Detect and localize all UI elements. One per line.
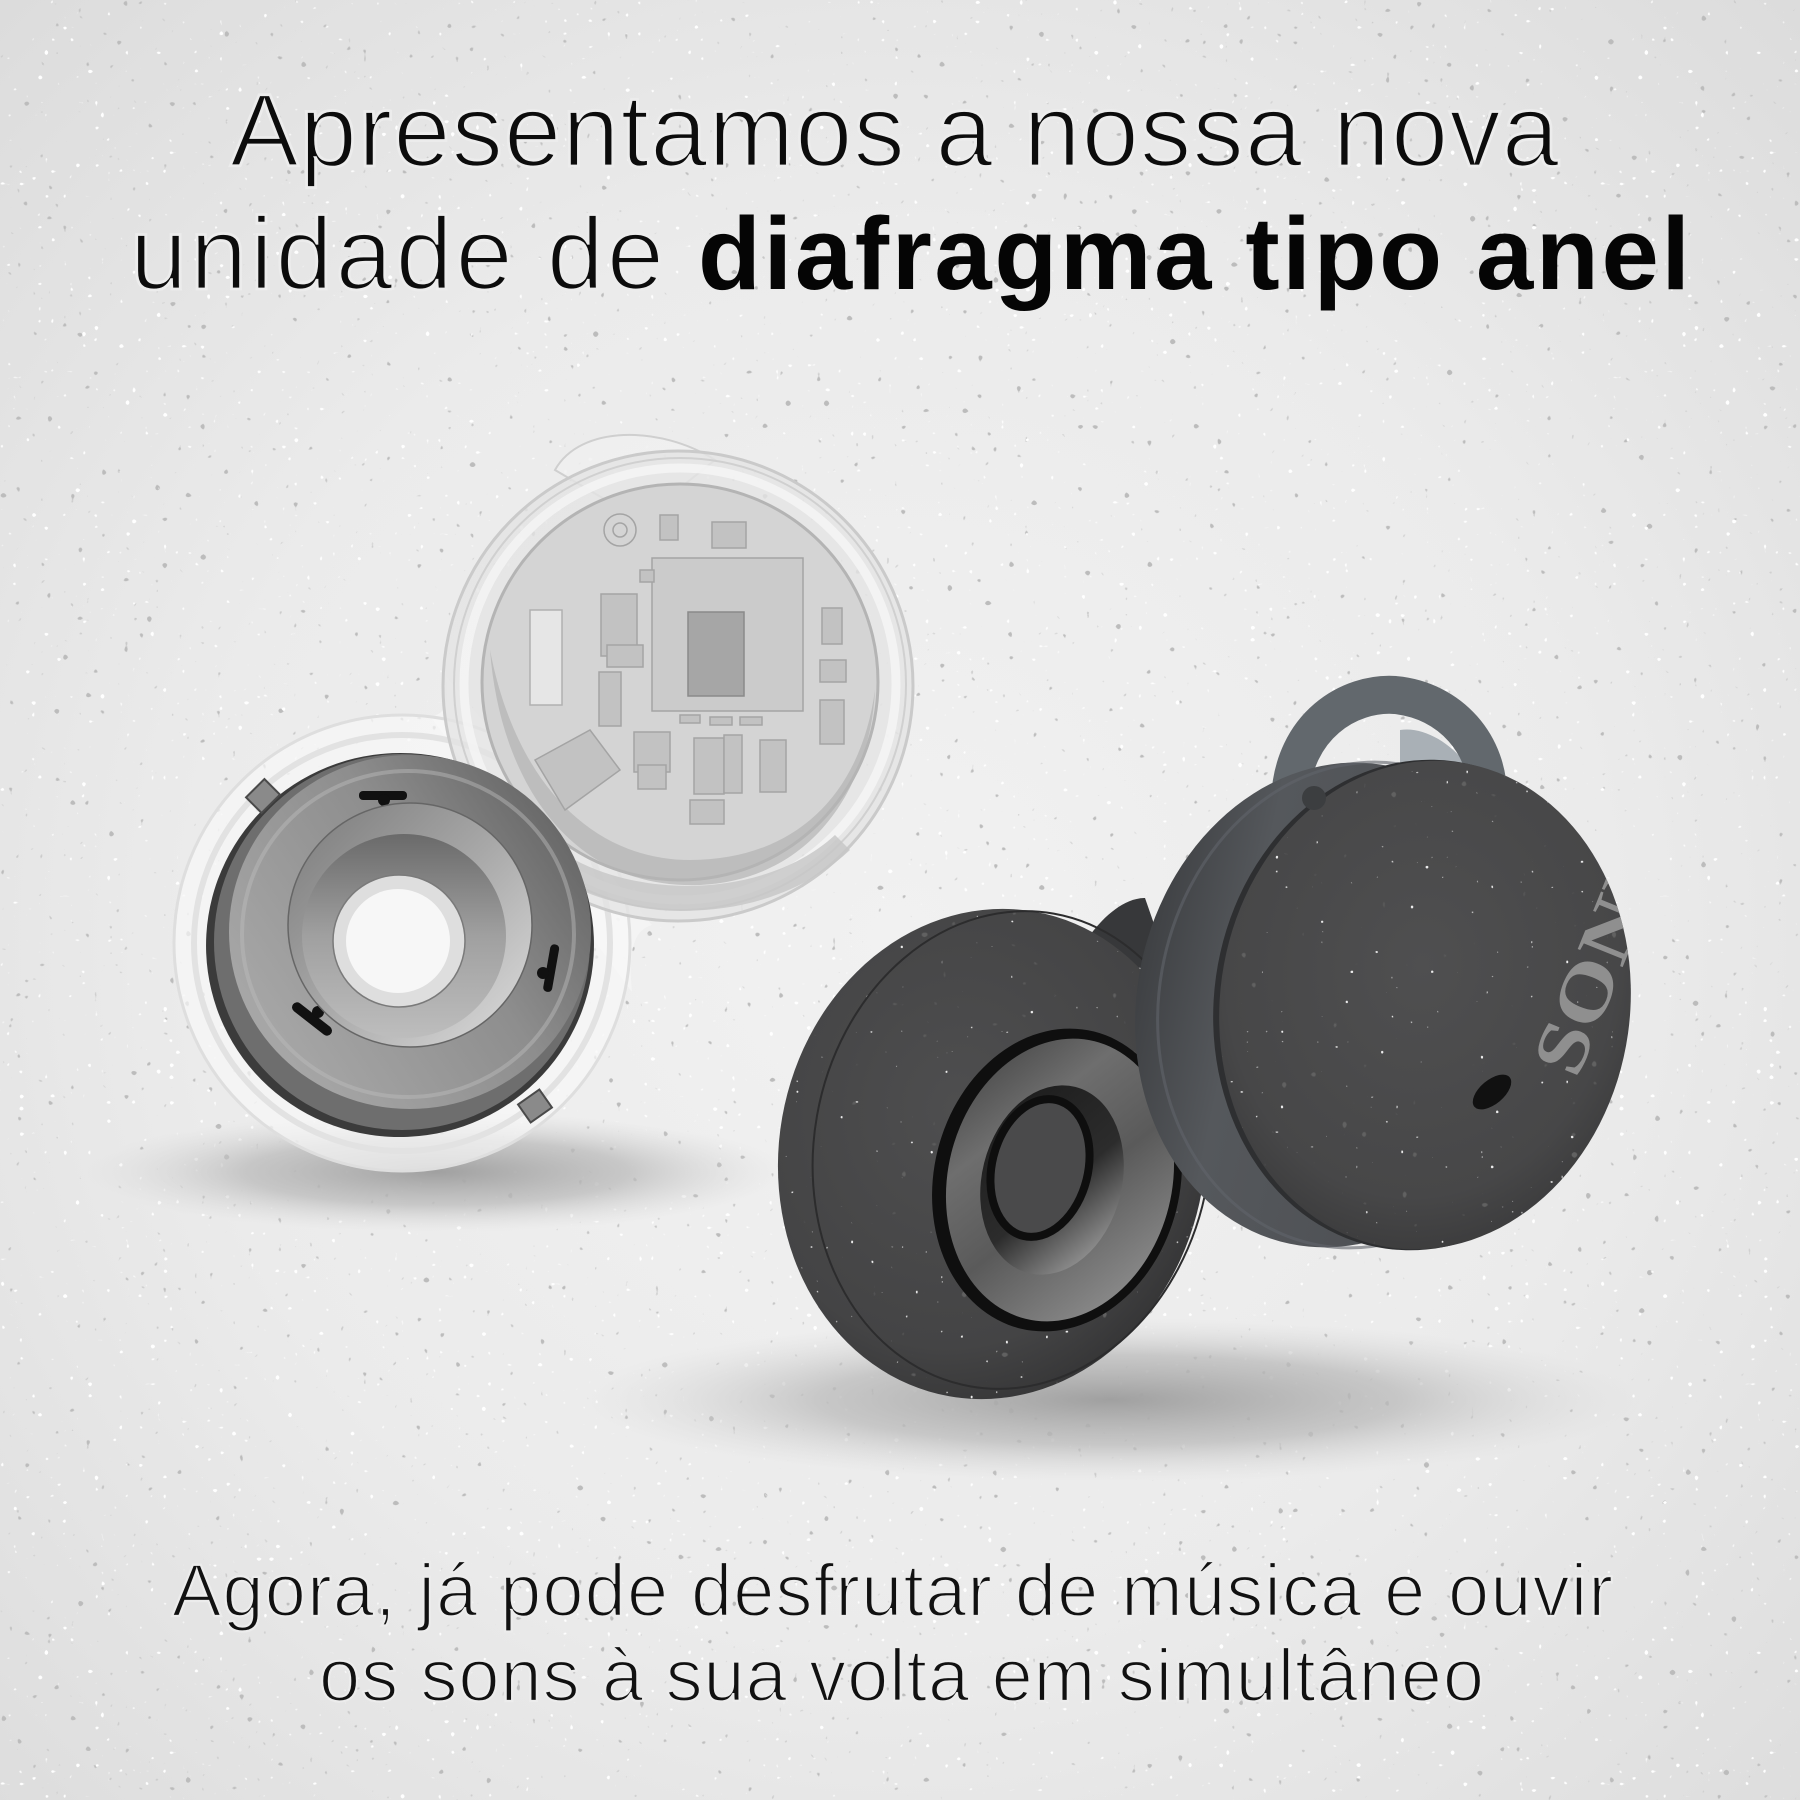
- illustration: dark grey earbud: [778, 676, 1631, 1400]
- slots: [290, 791, 560, 1038]
- illustration: transparent driver module: [174, 435, 913, 1171]
- mounting tabs: [246, 779, 552, 1122]
- clear shell: upper with circuit board: [443, 435, 913, 921]
- microphone hole: [1467, 1068, 1517, 1116]
- ring bud body: [740, 875, 1244, 1433]
- sphere: [1188, 734, 1662, 1276]
- sphere speckles: [1215, 755, 1635, 1255]
- clear shell: lower and waist: [174, 675, 652, 1171]
- brand logo: SONY: [1517, 824, 1686, 1086]
- title line 1: Apresentamos a nossa nova: [230, 73, 1560, 188]
- metal driver ring: [181, 728, 619, 1162]
- inner cavity: [302, 834, 506, 1038]
- clear collar: [333, 875, 465, 1007]
- stem: [1090, 898, 1170, 970]
- caption: [172, 1549, 1613, 1717]
- plate highlight: [242, 771, 574, 1097]
- ring bud seam: [775, 879, 1249, 1421]
- hook: [1290, 695, 1488, 800]
- caption line 1: Agora, já pode desfrutar de música e ouvir: [172, 1549, 1613, 1632]
- button: [1302, 786, 1326, 810]
- shadow: right earbud: [580, 1318, 1640, 1482]
- dark outer rim: [181, 728, 619, 1162]
- title line 2 bold: diafragma tipo anel: [698, 196, 1690, 311]
- title: [130, 73, 1690, 311]
- inner ring: [288, 803, 532, 1047]
- sphere edge: [1182, 733, 1658, 1277]
- ring bud speckles: [778, 912, 1193, 1398]
- circuit components: [530, 514, 846, 824]
- metal ring: [901, 1002, 1213, 1358]
- main plate: [229, 755, 591, 1109]
- caption line 2: os sons à sua volta em simultâneo: [319, 1634, 1484, 1717]
- shadow: left module: [86, 1112, 786, 1232]
- title line 2 regular: unidade de: [130, 196, 664, 311]
- band: [1091, 724, 1589, 1286]
- centre hole: [346, 889, 450, 993]
- lower rim band: [214, 754, 590, 1130]
- band highlight: [1120, 729, 1604, 1281]
